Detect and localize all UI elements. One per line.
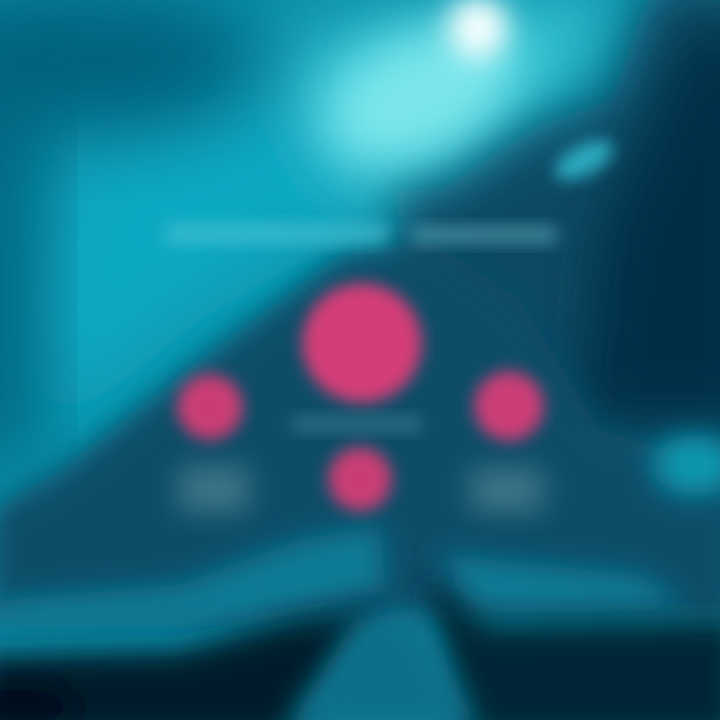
panel: left circle [177,374,243,440]
text block: blurred caption under left circle [178,466,250,512]
highlight: right cyan patch [653,435,720,495]
heading: blurred title line [165,224,390,244]
highlight: cloud top right [549,132,619,188]
panel: right circle [474,371,544,441]
text block: blurred caption under central circle [292,416,422,432]
background: darkest right mountain [580,30,720,420]
glow: sun [304,0,536,192]
glow: sky brightness [20,0,640,440]
foreground: dark bottom ground [0,580,720,720]
panel: bottom circle [328,447,392,511]
panel: central circle [302,283,422,403]
heading: blurred title line right [410,226,558,244]
text block: blurred caption under right circle [470,468,544,512]
background: dark top-left sky [0,0,260,130]
background: dark left edge [0,40,35,460]
background: dark right mountain [395,0,720,480]
foreground: central road [285,610,480,720]
background: central mountain [0,240,720,620]
foreground: lower teal band [0,525,690,630]
